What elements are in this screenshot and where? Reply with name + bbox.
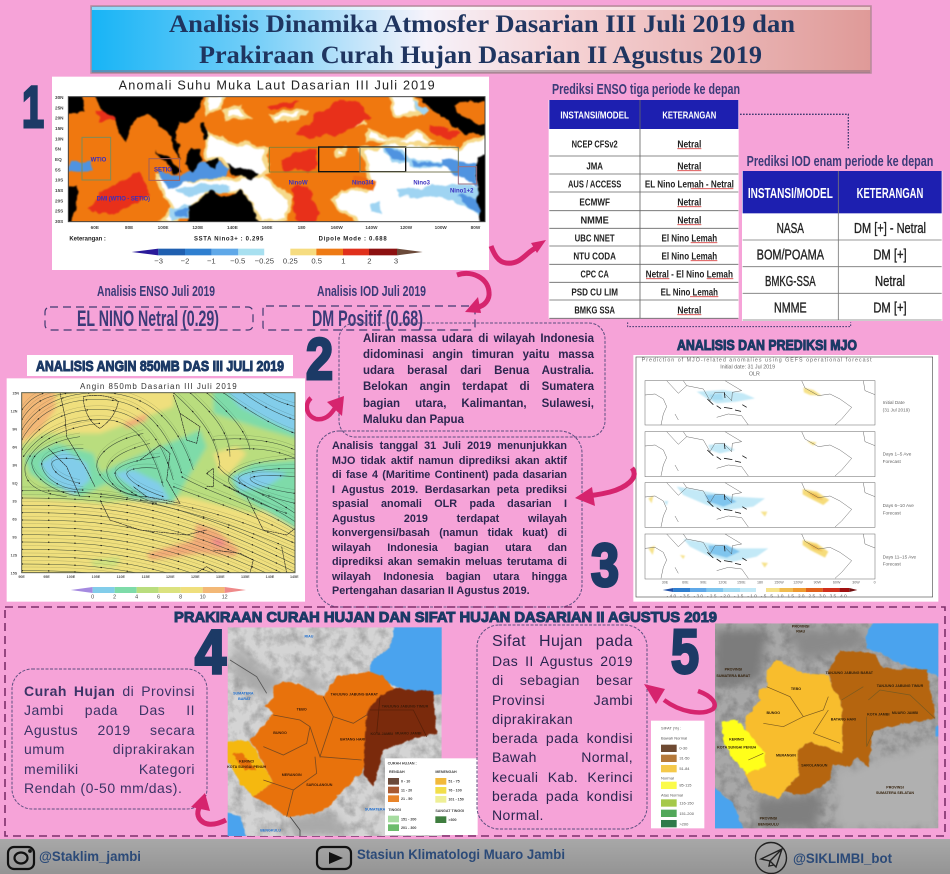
SST colour bar: −1 [207,256,216,265]
rain nature legend: 0-30 [679,746,688,751]
text: rain nature forecast: berada pada kondisi [492,788,633,804]
wind axes: 9S [12,535,17,539]
MJO panel: days 6-10: Days 6–10 Ave [883,503,914,508]
rain nature labels: BUNGO [767,711,780,715]
rainfall legend: 51 - 75 [448,780,460,784]
MJO panel: days 1-5: Days 1–5 Ave [883,452,912,457]
rainfall legend: RENDAH [389,770,405,774]
ENSO table: JMA [586,161,603,172]
ENSO table: NTU CODA [573,251,616,262]
wind axes: 3S [12,499,17,503]
IOD table: DM [+] [873,301,907,317]
SST anomaly map: DMI (WTIO - SETIO) [97,197,150,203]
map axes: 30N [55,95,64,100]
rainfall legend: 201 - 300 [401,826,416,830]
SST anomaly map: Nino1+2 [450,189,474,195]
wind map title: Angin 850mb Dasarian III Juli 2019 [80,382,237,391]
map axes: 10S [55,178,63,183]
text box: rain nature outline [477,625,647,829]
wind colour bar: 12 [222,595,228,601]
MJO panel: days 6-10 [645,483,914,527]
wind axes: 6S [12,517,17,521]
rain nature labels: SUMATERA SELATAN [876,791,914,795]
map axes [55,95,481,230]
text: rain nature forecast [492,633,633,823]
wind colour bar: 2 [113,595,116,601]
rain nature legend: >200 [679,822,689,827]
rainfall map labels: SAROLANGUN [306,783,333,787]
IOD table: NMME [774,301,807,317]
text: rain nature forecast: Sifat Hujan pada [492,633,633,650]
title banner: Prakiraan Curah Hujan Dasarian II Agustus 2019 [199,40,762,69]
rain nature labels: BATANG HARI [831,718,856,722]
rain nature labels: KOTA JAMBI [867,712,890,716]
MJO forecast chart: Initial date: 31 Jul 2019 [720,365,775,371]
text: MJO analysis: diprediksi akan semakin meluas terutama di [332,556,567,568]
arrow: SST to IOD label [457,274,489,313]
secondary streamlines [22,393,294,572]
text: rainfall forecast: Agustus 2019 secara [24,722,195,738]
rain nature labels: MUARO JAMBI [892,711,918,715]
map axes: 5N [55,147,62,152]
text box: wind outline [339,323,605,437]
MJO axis labels: 90W [814,580,822,584]
icon: instagram [8,847,34,869]
map axes: 25N [55,105,64,110]
MJO panel: initial date: Initial Date [883,400,905,405]
map axes: 120W [400,225,413,230]
text: wind analysis: didominasi angin timuran yaitu massa [363,349,594,361]
wind map heading: ANALISIS ANGIN 850MB DAS III JULI 2019 [36,358,284,375]
rain nature legend: SIFAT (%) : [661,725,681,730]
ENSO table: PSD CU LIM [571,287,618,298]
SST colour bar: 0.25 [283,256,298,265]
footer bar [0,839,950,874]
IOD table: NASA [777,221,804,237]
wind axes: 12S [11,553,18,557]
SST anomaly map: Nino3/4 [352,180,374,186]
wind axes: 9N [12,427,17,431]
MJO panel: days 11-15: Days 11–15 Ave [883,554,917,559]
text: rain nature forecast: Bawah Normal, [492,749,633,765]
rain nature labels: TANJUNG JABUNG TIMUR [877,684,924,688]
ENSO analysis label: Analisis ENSO Juli 2019 [97,283,215,300]
map axes: 100W [435,225,447,230]
text: wind analysis: udara berasal dari Benua Australia. [363,365,594,377]
rainfall legend [385,758,478,835]
connector: dotted line [740,114,848,148]
rainfall map [220,620,478,843]
text: rain nature forecast: di sebagian besar [492,672,633,688]
map axes: 160E [262,225,273,230]
text: wind analysis [363,333,594,426]
MJO axis labels: 180 [757,580,763,584]
wind axes: 145E [290,575,299,579]
MJO forecast chart [633,355,938,602]
rainfall map labels: SUMATERA [365,807,386,811]
text: rain nature forecast: Provinsi Jambi [492,692,633,708]
wind axes: 3N [12,463,17,467]
ENSO and IOD tables [549,82,942,327]
text: rain nature forecast: berada pada kondisi [492,730,633,746]
ENSO table: El Nino Lemah [661,251,717,262]
SST colour bar: −3 [154,256,163,265]
rainfall legend: TINGGI [388,808,401,812]
arrow: MJO chart to text [575,468,634,506]
icon: youtube [317,847,351,869]
map notes: Dipole Mode : 0.688 [319,237,387,243]
rain nature legend [651,721,704,828]
IOD analysis label: Analisis IOD Juli 2019 [317,283,426,300]
text: MJO analysis: Agustus 2019 terdapat wilayah [332,513,567,525]
rainfall legend: 0 - 10 [401,780,410,784]
MJO panel: days 1-5: Forecast [883,459,901,464]
text: MJO analysis: I Agustus 2019. Berdasarkan peta prediksi [332,484,567,496]
text: MJO analysis: MJO tidak aktif namun diprediksi akan aktif [332,455,567,467]
wind map heading [27,355,293,376]
wind colour bar: 0 [91,595,94,601]
MJO heading: ANALISIS DAN PREDIKSI MJO [677,338,857,354]
connector: lower dotted line [628,322,851,327]
map axes: 140W [365,225,378,230]
rainfall map labels: KOTA SUNGAI PENUH [227,765,267,769]
rain nature labels: TEBO [791,687,801,691]
text: wind analysis: bagian utara, Kalimantan, Sulawesi, [363,398,594,410]
map axes: 160W [331,225,343,230]
streamline arrowheads [22,393,294,572]
MJO colour bar [663,588,857,598]
text: rain nature forecast: Normal. [492,807,544,823]
text: rainfall forecast: umum diprakirakan [24,741,195,757]
ENSO table: AUS / ACCESS [568,179,622,190]
map axes: 25S [55,209,63,214]
rain nature labels: KERINCI [729,738,744,742]
youtube channel name: Stasiun Klimatologi Muaro Jambi [357,846,565,862]
SST colour bar: 0.5 [311,256,322,265]
ENSO table: INSTANSI/MODEL [560,111,629,122]
section frame: rainfall forecast [5,607,945,836]
ENSO table: NCEP CFSv2 [572,139,618,150]
SST colour bar: −2 [181,256,189,265]
text: wind analysis: Aliran massa udara di wilayah Indonesia [363,333,594,345]
wind axes: 125E [191,575,200,579]
rainfall legend: CURAH HUJAN : [388,762,417,766]
text: MJO analysis: konvergensi/basah (namun tidak kuat) di [332,527,567,539]
ENSO table: BMKG SSA [574,305,615,316]
SST anomaly map [50,77,503,270]
MJO panel: days 11-15: Forecast [883,562,901,567]
map axes: 10N [55,136,64,141]
wind axes: 90E [18,575,25,579]
number 2: 2 [306,327,333,392]
MJO colour bar: -40 -35 -30 -25 -20 -15 -10 -5 5 10 15 20 25 30 35 40 [667,593,847,598]
text: MJO analysis: wilayah Indonesia bagian utara dan [332,542,567,554]
wind axes: 6N [12,445,17,449]
map axes: 180 [298,225,306,230]
ENSO table: Netral [677,161,702,172]
SST colour bar: 1 [341,256,345,265]
rainfall map labels: BATANG HARI [340,738,365,742]
rainfall map labels: TEBO [297,708,307,712]
IOD analysis label: DM Positif (0.68) [312,306,423,331]
ENSO table: UBC NNET [575,233,615,244]
wind axes: 95E [43,575,50,579]
text box: MJO outline [317,431,582,607]
rain nature legend: 51-84 [679,766,690,771]
MJO axis labels: 150W [774,580,784,584]
ENSO table: EL Nino Lemah [661,287,718,298]
text: MJO analysis: Pertengahan dasarian II Agustus 2019. [332,585,530,597]
SST anomaly map: NinoW [289,180,308,186]
rain nature labels: BENGKULU [758,822,779,826]
SST anomaly map: SETIO [154,168,172,174]
telegram handle: @SIKLIMBI_bot [793,850,892,866]
rain nature labels: SAROLANGUN [801,764,828,768]
rain nature legend: 116-150 [679,800,694,805]
wind colour bar [71,587,246,601]
rainfall legend: 21 - 50 [401,797,412,801]
wind colour bar: 6 [157,595,160,601]
MJO panel: days 1-5 [645,432,912,477]
text: rain nature forecast: kecuali Kab. Kerinci [492,768,633,784]
map notes [69,237,387,243]
rainfall map labels: BENGKULU [260,829,281,833]
MJO panel: days 6-10: Forecast [883,510,901,515]
text: rainfall forecast [24,683,195,796]
ENSO table: Netral [677,139,702,150]
title banner: Analisis Dinamika Atmosfer Dasarian III Juli 2019 dan [169,9,795,38]
ENSO table: ECMWF [579,197,610,208]
wind axes: 105E [92,575,101,579]
rain nature labels: TANJUNG JABUNG BARAT [826,671,874,675]
map axes: 80E [125,225,133,230]
map axes: 80W [471,225,481,230]
rainfall map labels: BUNGO [273,731,287,735]
map axes: 5S [55,167,61,172]
wind colour bar: 8 [179,595,182,601]
IOD table: BOM/POAMA [757,247,824,263]
rainfall legend: 101 - 150 [448,798,464,802]
map notes: SSTA Nino3+ : 0.295 [194,237,264,243]
MJO axis labels: 90E [700,580,707,584]
rainfall map labels: KERINCI [239,759,254,763]
rainfall map labels: TANJUNG JABUNG TIMUR [382,705,429,709]
rain nature map [651,617,947,837]
ENSO analysis label: EL NINO Netral (0.29) [77,306,219,331]
SST colour bar [132,249,423,265]
ENSO table: CPC CA [580,269,609,280]
rainfall legend: 151 - 200 [401,817,416,821]
text: rainfall forecast: Jambi pada Das II [24,702,195,718]
MJO axis labels: 0 [874,580,876,584]
wind map [6,378,305,602]
rainfall legend: SANGAT TINGGI [435,809,464,813]
rainfall map labels: BARAT [238,697,251,701]
ENSO table: EL Nino Lemah - Netral [645,179,734,190]
number 5: 5 [671,618,699,687]
rain nature labels: PROVINSI [886,786,904,790]
arrow: rainfall map to text [191,793,226,824]
wind axes: 135E [241,575,250,579]
rainfall map labels: TANJUNG JABUNG BARAT [331,693,379,697]
MJO forecast chart: Prediction of MJO-related anomalies using GEFS operational forecast [642,358,872,364]
number 3: 3 [591,532,619,599]
rain nature labels: PROVINSI [725,668,742,672]
rain nature legend: Atas Normal [661,793,683,798]
wind axes: 115E [142,575,151,579]
instagram handle: @Staklim_jambi [39,848,141,864]
rainfall map labels: SUMATERA [233,691,254,695]
rainfall map labels: KOTA JAMBI [370,732,393,736]
rain nature labels: PROVINSI [760,816,777,820]
text: rainfall forecast: Curah Hujan di Provinsi [24,683,195,699]
wind axes: EQ [12,481,18,485]
map axes: 30S [55,219,63,224]
MJO axis labels: 150E [737,580,746,584]
rainfall legend: >300 [448,818,457,822]
ENSO table [549,100,739,319]
rain nature labels: MERANGIN [776,754,796,758]
rain nature labels [716,624,924,826]
arrow: rain nature map to text [644,684,715,712]
rain nature labels: RIAU [796,630,805,634]
rain nature legend: 85-115 [679,782,692,787]
MJO panel: initial date [645,381,910,425]
wind axes: 12N [11,409,18,413]
ENSO analysis label [45,283,253,331]
text box: rainfall outline [12,669,207,809]
SST colour bar: 2 [367,256,371,265]
ENSO table: Netral - El Nino Lemah [646,269,733,280]
text: wind analysis: Maluku dan Papua [363,414,464,426]
coastlines [48,393,295,573]
map notes: Keterangan : [69,237,106,243]
text: MJO analysis: spasial anomali OLR pada dasarian I [332,498,567,510]
map axes: 20N [55,116,64,121]
ENSO table: El Nino Lemah [661,233,717,244]
wind axes: 140E [266,575,275,579]
rain nature legend: 31-50 [679,756,690,761]
SST colour bar: −0.25 [255,256,274,265]
text: rain nature forecast: Das II Agustus 2019 [492,653,633,669]
wind axes: 15N [12,391,19,395]
ENSO table: KETERANGAN [662,111,716,122]
number 1: 1 [22,75,44,140]
text: rainfall forecast: Rendah (0-50 mm/das). [24,780,182,796]
MJO axis labels: 30E [662,580,669,584]
rain nature legend: 151-200 [679,811,695,816]
map axes: 60E [91,225,99,230]
text: rainfall forecast: memiliki Kategori [24,761,195,777]
map axes: 120E [192,225,203,230]
wind axes: 110E [117,575,126,579]
MJO axis labels: 60E [682,580,689,584]
map axes: EQ [55,157,62,162]
map title: Anomali Suhu Muka Laut Dasarian III Juli 2019 [119,78,435,92]
IOD table: INSTANSI/MODEL [748,186,833,202]
MJO axis labels: 60W [833,580,841,584]
ENSO table: NMME [580,215,609,226]
IOD table: DM [+] [873,247,907,263]
wind colour bar: 4 [135,595,138,601]
wind axes: 120E [166,575,175,579]
wind axes: 100E [67,575,76,579]
text: MJO analysis [332,440,568,597]
SST colour bar: −0.5 [230,256,245,265]
MJO axis labels: 30W [852,580,860,584]
ENSO table: Netral [677,197,702,208]
arrow: text to wind map [307,396,344,419]
text: wind analysis: Belokan angin terdapat di Sumatera [363,381,594,393]
MJO axis labels [662,580,876,584]
wind axes: 15S [11,571,18,575]
wind colour bar: 10 [200,595,206,601]
ENSO table: Netral [677,215,702,226]
SST anomaly map: WTIO [91,158,107,164]
rain nature legend: Normal [661,776,674,781]
IOD table: DM [+] - Netral [854,221,926,237]
rainfall map labels [227,634,429,833]
icon: telegram [756,842,786,874]
rainfall legend: 11 - 20 [401,788,412,792]
MJO axis labels: 120W [793,580,803,584]
arrow: SST to ENSO table [491,240,546,263]
map axes: 15S [55,188,63,193]
SST colour bar: 3 [394,256,398,265]
text: rain nature forecast: diprakirakan [492,711,573,727]
ENSO table: Netral [677,305,702,316]
streamlines [22,393,294,572]
map axes: 140E [227,225,238,230]
IOD table: BMKG-SSA [765,274,816,290]
rainfall map labels: MUARO JAMBI [395,731,421,735]
rain nature labels: PROVINSI [792,624,809,628]
MJO axis labels: 120E [718,580,727,584]
map axes: 20S [55,198,63,203]
text: MJO analysis: wilayah Indonesia bagian utara hingga [332,571,567,583]
title banner [91,6,871,73]
section heading: PRAKIRAAN CURAH HUJAN DAN SIFAT HUJAN DASARIAN II AGUSTUS 2019 [174,609,717,626]
IOD table: Netral [875,274,905,290]
MJO forecast chart: OLR [749,371,760,377]
rain nature labels: KOTA SUNGAI PENUH [717,745,757,749]
ENSO table heading: Prediksi ENSO tiga periode ke depan [552,82,740,98]
text: MJO analysis: Analisis tanggal 31 Juli 2019 menunjukkan [332,440,567,452]
map axes: 100E [158,225,169,230]
wind axes: 130E [216,575,225,579]
rain nature labels: SUMATERA BARAT [716,674,751,678]
map axes: 15N [55,126,64,131]
rain nature legend: Bawah Normal [661,736,687,741]
number 4: 4 [195,618,226,687]
rainfall legend: 76 - 100 [448,789,462,793]
rainfall map labels: RIAU [305,634,314,638]
text: MJO analysis: di fase 4 (Maritime Continent) pada dasarian [332,469,567,481]
IOD table [742,171,942,321]
MJO panel: days 11-15 [645,534,917,579]
MJO panel: initial date: (31 Jul 2019) [883,407,910,412]
rainfall map labels: MERANGIN [282,773,302,777]
wind axes [11,391,299,579]
rainfall legend: MENENGAH [435,770,457,774]
SST anomaly map: Nino3 [413,180,431,186]
IOD analysis label [263,283,475,331]
